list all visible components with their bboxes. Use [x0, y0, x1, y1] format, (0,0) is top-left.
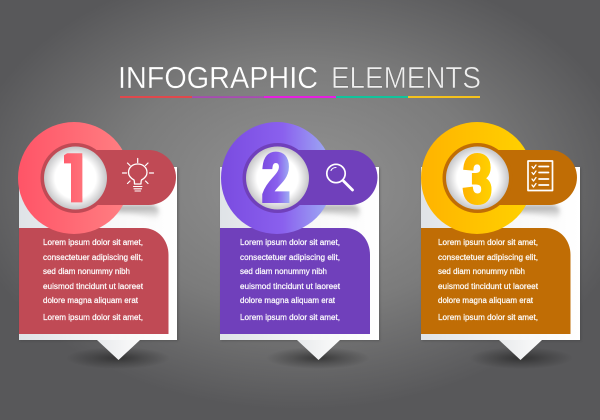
- body text 3: dolore magna aliquam erat: [438, 295, 534, 305]
- number circle 3: [421, 122, 533, 234]
- title: ELEMENTS: [331, 60, 481, 95]
- tab shadow 1: [100, 205, 159, 220]
- body text 3: Lorem ipsum dolor sit amet,: [438, 237, 538, 247]
- numeral 1: 1: [57, 142, 95, 218]
- title: [118, 60, 481, 95]
- number circle 1: [18, 122, 130, 234]
- text panel 1: [19, 228, 168, 334]
- title: INFOGRAPHIC: [118, 60, 318, 95]
- tab 3: [478, 150, 577, 205]
- body text 2: sed diam nonummy nibh: [240, 266, 327, 276]
- panel: step 1: [18, 122, 178, 369]
- body text 3: euismod tincidunt ut laoreet: [438, 281, 539, 291]
- body text 1: consectetuer adipiscing elit,: [43, 252, 143, 262]
- card 1 with pointer: [19, 167, 178, 369]
- tab 2: [278, 150, 377, 205]
- icon: light bulb: [122, 158, 154, 191]
- icon: checklist: [528, 161, 552, 190]
- number ring 3: [442, 143, 512, 213]
- text panel 3: [421, 228, 570, 334]
- number circle 2: [221, 122, 333, 234]
- panel: step 3: [421, 122, 581, 369]
- body text 1: sed diam nonummy nibh: [43, 266, 130, 276]
- body text 2: euismod tincidunt ut laoreet: [240, 281, 341, 291]
- tab shadow 3: [500, 205, 560, 220]
- number ring 2: [242, 143, 312, 213]
- text panel 2: [220, 228, 370, 334]
- body text 1: Lorem ipsum dolor sit amet,: [43, 237, 143, 247]
- card 2 with pointer: [220, 167, 380, 369]
- body text 3: sed diam nonummy nibh: [438, 266, 525, 276]
- body text 1: euismod tincidunt ut laoreet: [43, 281, 144, 291]
- icon: magnifying glass: [327, 164, 352, 190]
- card 3 with pointer: [421, 167, 581, 369]
- panel: step 2: [220, 122, 380, 369]
- numeral 2: 2: [262, 140, 290, 216]
- body text 1: Lorem ipsum dolor sit amet,: [43, 312, 143, 322]
- tab shadow 2: [300, 205, 360, 220]
- title rule: five colour segments: [120, 96, 480, 98]
- body text 2: consectetuer adipiscing elit,: [240, 252, 340, 262]
- body text 3: [438, 237, 539, 322]
- body text 3: Lorem ipsum dolor sit amet,: [438, 312, 538, 322]
- number ring 1: [40, 143, 110, 213]
- body text 1: dolore magna aliquam erat: [43, 295, 139, 305]
- body text 2: Lorem ipsum dolor sit amet,: [240, 312, 340, 322]
- body text 2: Lorem ipsum dolor sit amet,: [240, 237, 340, 247]
- tab 1: [75, 150, 176, 205]
- body text 2: [240, 237, 341, 322]
- numeral 3: 3: [463, 140, 492, 217]
- body text 1: [43, 237, 144, 322]
- body text 2: dolore magna aliquam erat: [240, 295, 336, 305]
- body text 3: consectetuer adipiscing elit,: [438, 252, 538, 262]
